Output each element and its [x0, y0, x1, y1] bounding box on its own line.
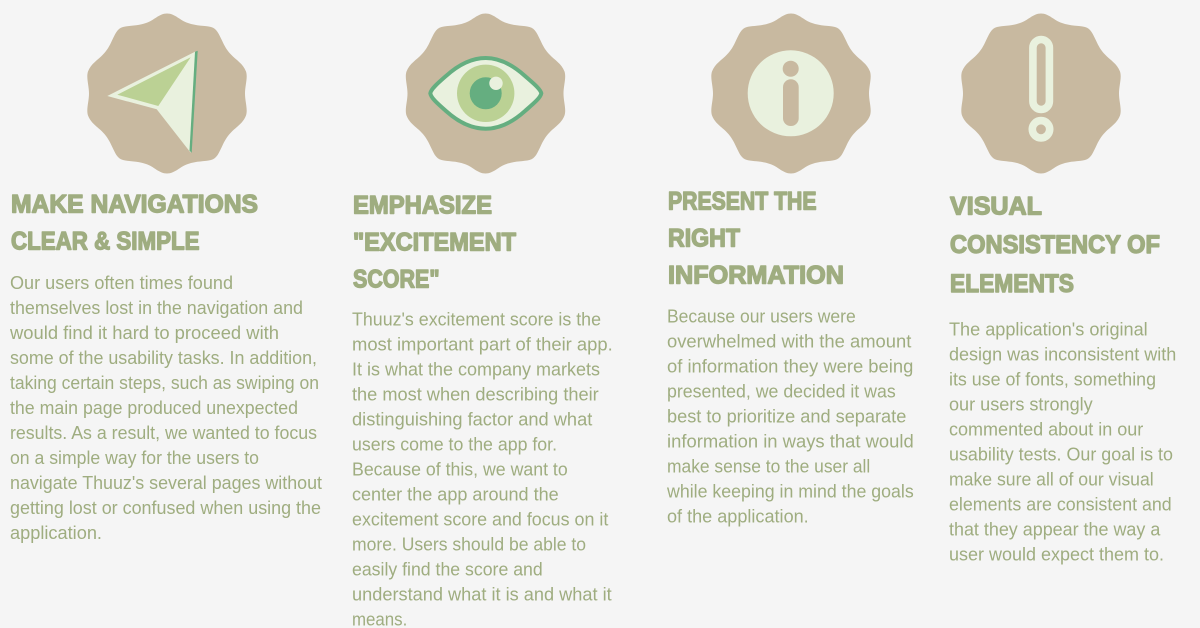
body text: taking certain steps, such as swiping on [10, 373, 319, 393]
body text: some of the usability tasks. In addition, [10, 348, 317, 368]
body text: the most when describing their [352, 384, 599, 404]
highlight [489, 77, 503, 90]
icon: eye badge [406, 14, 565, 174]
heading: RIGHT [668, 224, 740, 252]
body text [352, 310, 613, 628]
body text: users come to the app for. [352, 434, 557, 454]
body text: themselves lost in the navigation and [10, 298, 303, 318]
body text: information in ways that would [667, 432, 914, 452]
body text: most important part of their app. [352, 334, 613, 354]
body text: user would expect them to. [949, 545, 1164, 565]
body text: Thuuz's excitement score is the [352, 310, 601, 330]
badge shape [87, 14, 247, 174]
body text: make sure all of our visual [949, 470, 1154, 490]
badge shape [961, 14, 1121, 174]
eye outline [430, 58, 541, 129]
panel: make navigations clear and simple [9, 14, 322, 543]
heading: INFORMATION [668, 262, 844, 290]
body text: more. Users should be able to [352, 534, 586, 554]
body text: commented about in our [949, 420, 1143, 440]
body text: Because our users were [667, 307, 856, 327]
panel: emphasize excitement score [352, 14, 613, 628]
info dot [783, 61, 799, 77]
heading: SCORE" [353, 266, 440, 294]
info disc [748, 50, 834, 136]
arrow fold [117, 57, 191, 106]
heading: ELEMENTS [950, 270, 1074, 298]
pupil [470, 77, 502, 109]
heading [950, 192, 1160, 298]
body text: getting lost or confused when using the [10, 498, 321, 518]
exclamation bar [1033, 40, 1049, 110]
body text: while keeping in mind the goals [666, 482, 914, 502]
icon: information badge [711, 14, 871, 174]
body text: usability tests. Our goal is to [949, 445, 1173, 465]
body text: excitement score and focus on it [352, 510, 608, 530]
exclamation dot [1032, 121, 1050, 138]
body text [666, 307, 914, 527]
body text: Our users often times found [10, 273, 233, 293]
arrow edge [190, 51, 198, 153]
body text: make sense to the user all [667, 457, 870, 477]
badge shape [711, 14, 871, 174]
icon: exclamation badge [961, 14, 1121, 174]
body text: design was inconsistent with [949, 345, 1176, 365]
body text: distinguishing factor and what [352, 410, 592, 430]
body text: its use of fonts, something [949, 370, 1156, 390]
heading: CLEAR & SIMPLE [11, 228, 200, 256]
icon: navigation arrow badge [87, 14, 247, 174]
body text: overwhelmed with the amount [667, 332, 911, 352]
iris [457, 65, 514, 122]
body text: easily find the score and [352, 560, 543, 580]
heading [668, 188, 844, 290]
body text: center the app around the [352, 484, 559, 504]
heading: EMPHASIZE [353, 192, 492, 220]
heading: MAKE NAVIGATIONS [11, 190, 258, 218]
badge shape [406, 14, 565, 174]
body text: presented, we decided it was [667, 382, 896, 402]
body text: that they appear the way a [949, 520, 1161, 540]
body text: understand what it is and what it [352, 584, 612, 604]
body text: on a simple way for the users to [10, 448, 259, 468]
body text: elements are consistent and [949, 495, 1172, 515]
info stem [783, 79, 799, 126]
body text: of the application. [667, 507, 809, 527]
panel: visual consistency of elements [949, 14, 1176, 565]
body text: best to prioritize and separate [667, 407, 906, 427]
heading: PRESENT THE [668, 188, 816, 216]
body text: our users strongly [949, 395, 1093, 415]
body text: would find it hard to proceed with [9, 323, 279, 343]
body text: Because of this, we want to [352, 460, 568, 480]
heading: "EXCITEMENT [353, 228, 516, 256]
heading [11, 190, 258, 256]
heading: CONSISTENCY OF [950, 231, 1160, 259]
body text: application. [10, 523, 102, 543]
panel: present the right information [666, 14, 914, 527]
heading [353, 192, 516, 294]
body text: results. As a result, we wanted to focus [10, 423, 317, 443]
body text: navigate Thuuz's several pages without [10, 473, 322, 493]
body text: of information they were being [667, 357, 913, 377]
heading: VISUAL [950, 192, 1042, 220]
body text [9, 273, 322, 543]
body text: It is what the company markets [352, 360, 600, 380]
body text: the main page produced unexpected [10, 398, 298, 418]
body text: The application's original [949, 320, 1148, 340]
arrow body [107, 52, 196, 153]
body text [949, 320, 1176, 565]
